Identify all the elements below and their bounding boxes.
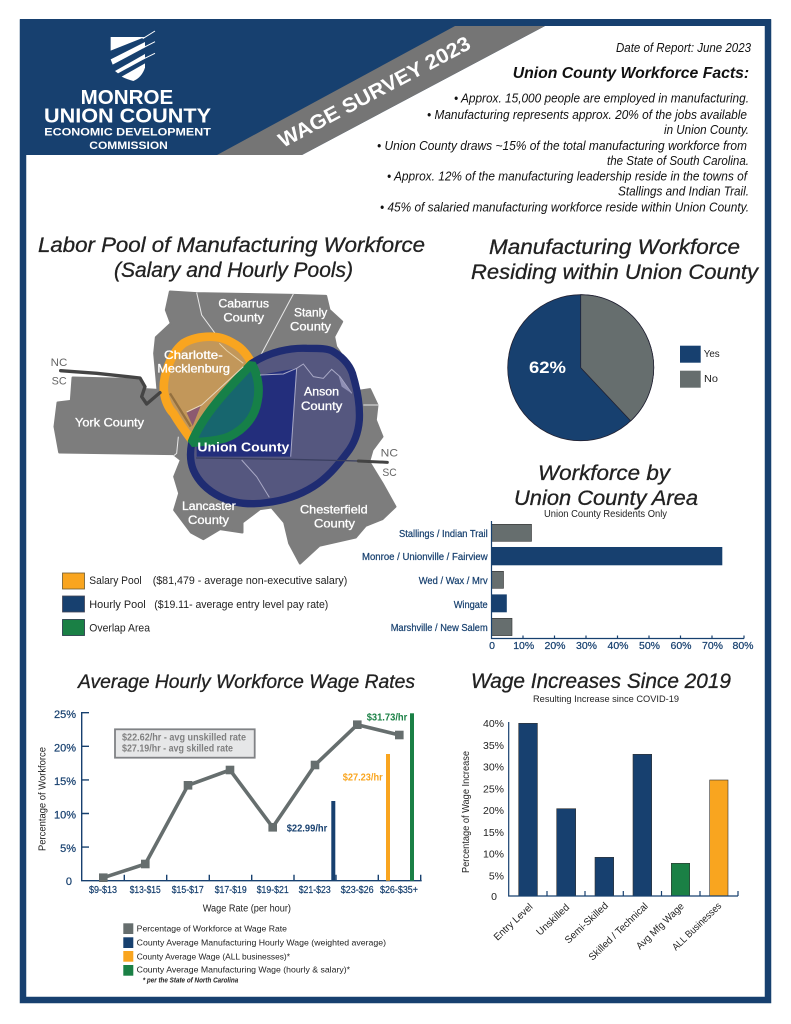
county labels: Cabarrus [218, 298, 269, 311]
x axis labels [89, 885, 418, 896]
heading: labor pool: (Salary and Hourly Pools) [114, 259, 353, 282]
callout: average rates: $27.19/hr - avg skilled rate [122, 744, 233, 755]
heading: residing: Manufacturing Workforce [489, 236, 740, 259]
line chart legend: * per the State of North Carolina [143, 978, 238, 985]
x axis labels: $13-$15 [130, 885, 161, 896]
inner boundaries [170, 343, 352, 497]
facts list: • Approx. 15,000 people are employed in manufacturing. [454, 91, 749, 106]
heading: workforce by area [514, 462, 698, 520]
value axis labels: 20% [544, 640, 566, 652]
county labels: York County [75, 417, 144, 430]
line chart: Percentage of Workforce [38, 747, 49, 851]
logo: organisation name [44, 87, 212, 152]
facts list: • Manufacturing represents approx. 20% of the jobs available [427, 107, 747, 122]
state labels [51, 357, 398, 479]
report date: Date of Report: June 2023 [616, 40, 752, 55]
pie chart [508, 295, 654, 441]
line markers [99, 720, 404, 882]
axes [82, 713, 422, 881]
pie legend: No [704, 373, 718, 385]
value axis labels: 70% [702, 640, 723, 652]
overlap area [192, 364, 259, 443]
map legend [62, 573, 347, 636]
county labels: Stanly [294, 307, 327, 320]
wage marker labels: $22.99/hr [287, 823, 327, 835]
value axis labels: 50% [639, 640, 660, 652]
category labels: Avg Mfg Wage [634, 901, 687, 952]
category labels: Stallings / Indian Trail [399, 529, 488, 540]
heading: average hourly wages: Average Hourly Workforce Wage Rates [77, 671, 415, 693]
line chart legend: County Average Manufacturing Wage (hourly & salary)* [137, 965, 351, 975]
columns [519, 723, 728, 896]
facts list: the State of South Carolina. [607, 153, 749, 168]
facts heading: Union County Workforce Facts: [513, 65, 749, 82]
x axis labels: $15-$17 [172, 885, 204, 896]
map legend: Hourly Pool [89, 599, 146, 611]
facts list: Stallings and Indian Trail. [618, 184, 749, 199]
county labels: County [314, 518, 355, 531]
y labels: 40% [483, 718, 504, 730]
logo: organisation name: MONROE [81, 87, 173, 109]
logo: shield icon [111, 31, 155, 81]
heading: residing: Residing within Union County [471, 261, 760, 284]
axes [492, 521, 744, 638]
y labels: 15% [483, 827, 504, 839]
horizontal bar chart [362, 521, 754, 652]
callout: average rates [115, 729, 255, 758]
x axis labels: $9-$13 [89, 885, 117, 896]
axis titles: Wage Rate (per hour) [203, 904, 291, 915]
wage marker labels: $31.73/hr [367, 712, 407, 724]
heading: wage increases [471, 670, 731, 705]
map legend: ($81,479 - average non-executive salary) [153, 575, 347, 587]
category labels [362, 529, 488, 634]
heading: workforce by area: Union County Area [514, 487, 698, 510]
y labels [483, 718, 504, 903]
union county solid area [197, 368, 297, 457]
y labels: 20% [483, 805, 504, 817]
county boundaries [173, 293, 378, 456]
state labels: SC [382, 467, 397, 479]
line chart [38, 709, 422, 915]
line chart legend: Percentage of Workforce at Wage Rate [137, 924, 287, 934]
salary pool area [164, 337, 252, 440]
y labels: 10% [483, 849, 504, 861]
heading: residing [471, 236, 760, 284]
header ribbon: wage survey: WAGE SURVEY 2023 [275, 32, 474, 152]
value axis labels: 10% [513, 640, 534, 652]
hourly pool area [191, 348, 359, 504]
facts list: • 45% of salaried manufacturing workforce reside within Union County. [380, 200, 749, 215]
pie chart: 62% [529, 358, 566, 377]
facts list: • Approx. 12% of the manufacturing leadership reside in the towns of [387, 169, 748, 184]
y axis labels [54, 709, 76, 888]
axes [509, 722, 738, 896]
category labels: Semi-Skilled [563, 901, 611, 946]
y labels: 35% [483, 740, 504, 752]
line chart legend [123, 923, 386, 985]
facts list: in Union County. [664, 122, 749, 137]
heading: labor pool [38, 234, 425, 282]
heading: workforce by area: Workforce by [538, 462, 672, 485]
logo: organisation name: UNION COUNTY [44, 106, 212, 128]
category labels: Wed / Wax / Mrv [419, 576, 488, 587]
category labels: Marshville / New Salem [391, 623, 488, 634]
pie legend: Yes [704, 348, 720, 360]
heading: labor pool: Labor Pool of Manufacturing Workforce [38, 234, 425, 257]
logo: organisation name: ECONOMIC DEVELOPMENT [44, 126, 211, 138]
y labels: 5% [489, 870, 504, 882]
county labels: Anson [304, 386, 339, 399]
value axis labels: 30% [576, 640, 597, 652]
wage marker labels [287, 712, 407, 835]
heading: wage increases: Resulting Increase since COVID-19 [533, 694, 679, 705]
category labels: Wingate [454, 600, 488, 611]
line chart legend: County Average Manufacturing Hourly Wage (weighted average) [137, 938, 386, 948]
wage marker labels: $27.23/hr [343, 772, 383, 784]
facts list [377, 91, 749, 215]
map legend: Overlap Area [89, 622, 151, 634]
x axis labels: $17-$19 [215, 885, 247, 896]
pie legend [680, 346, 720, 388]
state line [61, 371, 387, 462]
column chart [461, 718, 738, 963]
category labels: Skilled / Technical [587, 901, 651, 963]
map legend: ($19.11- average entry level pay rate) [154, 599, 328, 611]
y axis labels: 25% [54, 709, 76, 721]
y labels: 25% [483, 784, 504, 796]
y labels: 30% [483, 762, 504, 774]
map: labor pool [51, 292, 398, 563]
callout: average rates: $22.62/hr - avg unskilled rate [122, 733, 246, 744]
state labels: NC [381, 448, 398, 460]
county labels: County [301, 400, 343, 413]
heading: wage increases: Wage Increases Since 2019 [471, 670, 731, 693]
header banner [20, 19, 771, 155]
bars [492, 524, 722, 636]
workforce line [103, 725, 399, 878]
category labels: Entry Level [492, 902, 535, 943]
y axis labels: 5% [60, 843, 76, 855]
county labels: County [223, 312, 264, 325]
map base counties [55, 292, 395, 563]
line chart legend: County Average Wage (ALL businesses)* [137, 951, 291, 961]
county labels: Charlotte- [164, 349, 223, 362]
y axis title: Percentage of Wage Increase [461, 751, 472, 873]
county labels: County [188, 514, 229, 527]
y axis labels: 20% [54, 742, 76, 754]
county labels: Union County [197, 441, 289, 455]
logo: organisation name: COMMISSION [89, 140, 168, 152]
header ribbon: wage survey [217, 26, 545, 155]
x axis labels: $23-$26 [341, 885, 374, 896]
county labels [75, 298, 368, 531]
category labels [492, 901, 724, 963]
value axis labels: 60% [670, 640, 692, 652]
value axis labels: 0 [489, 640, 495, 652]
category labels: Monroe / Unionville / Fairview [362, 552, 488, 563]
facts list: • Union County draws ~15% of the total manufacturing workforce from [377, 138, 747, 153]
value axis labels: 40% [607, 640, 629, 652]
county labels: Mecklenburg [157, 363, 230, 376]
y axis labels: 0 [66, 876, 72, 888]
y axis labels: 15% [54, 776, 76, 788]
y axis labels: 10% [54, 810, 76, 822]
x axis labels: $19-$21 [257, 885, 289, 896]
map legend: Salary Pool [89, 575, 142, 587]
value axis labels: 80% [732, 640, 754, 652]
state labels: NC [51, 357, 68, 369]
category labels: ALL Businesses [670, 901, 724, 953]
county labels: Chesterfield [300, 503, 368, 516]
county labels: County [290, 321, 331, 334]
category labels: Unskilled [535, 902, 572, 938]
y labels: 0 [491, 891, 497, 903]
x axis labels: $21-$23 [299, 885, 331, 896]
county labels: Lancaster [182, 500, 236, 513]
wage marker bars [331, 801, 335, 881]
x axis labels: $26-$35+ [380, 885, 418, 896]
state labels: SC [52, 375, 67, 387]
heading: workforce by area: Union County Residents Only [544, 509, 667, 520]
value axis labels [489, 640, 754, 652]
